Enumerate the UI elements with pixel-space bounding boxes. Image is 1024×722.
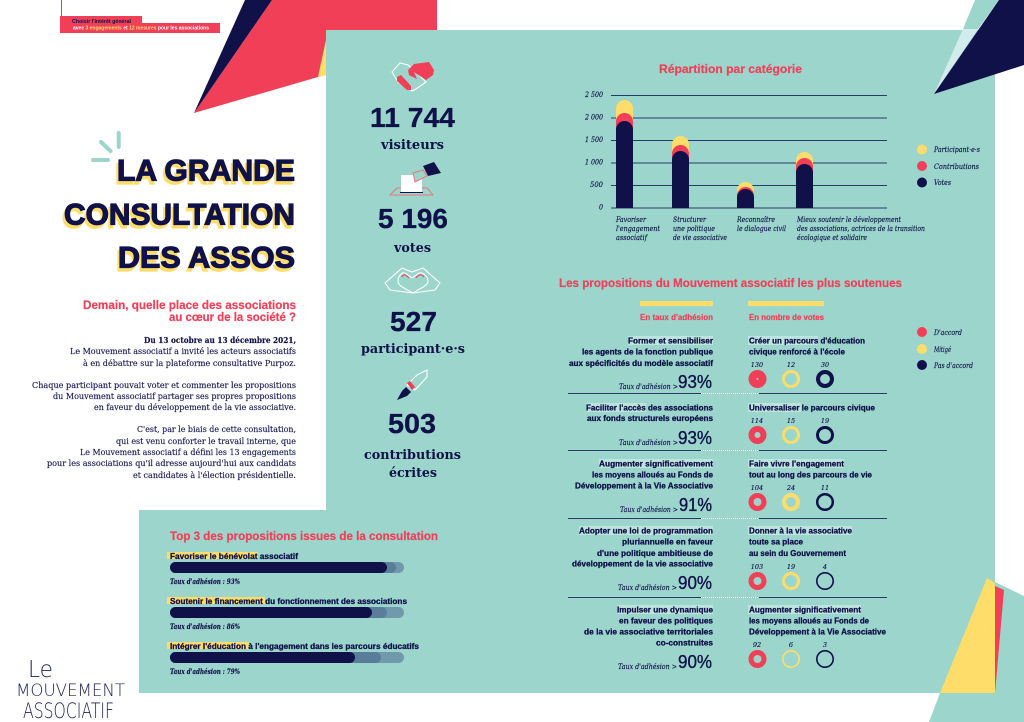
proposition row 1: 93% xyxy=(678,372,712,392)
subtitle xyxy=(83,300,296,324)
proposition row 1: les agents de la fonction publique xyxy=(582,346,713,356)
bar: soutenir le financement: Taux d'adhésion : 86% xyxy=(170,622,240,631)
proposition row 5: Impulser une dynamique xyxy=(617,604,713,614)
proposition row 3: Augmenter significativement xyxy=(599,458,713,468)
proposition row 5: en faveur des politiques xyxy=(619,616,713,626)
proposition row 5: Développement à la Vie Associative xyxy=(749,626,886,636)
category labels: l'engagement xyxy=(616,224,661,233)
panel: key figures xyxy=(361,62,465,481)
proposition row 5: 92 xyxy=(753,641,761,649)
proposition row 3 xyxy=(575,458,872,515)
proposition row 4: 4 xyxy=(822,563,827,571)
intro text: du Mouvement associatif partager ses propres propositions xyxy=(53,392,296,402)
document tag: avec 3 engagements et 12 mesures pour les associations xyxy=(73,26,209,32)
proposition row 2: 15 xyxy=(787,417,795,425)
bar: intégrer l'éducation: Taux d'adhésion : 79% xyxy=(170,667,240,676)
proposition row 3: les moyens alloués au Fonds de xyxy=(592,470,713,480)
proposition row 4: Donner à la vie associative xyxy=(749,526,852,536)
title: LA GRANDE xyxy=(117,154,295,188)
y axis labels: 1 000 xyxy=(585,158,603,166)
stat: contributions xyxy=(364,408,461,481)
document tag xyxy=(60,0,220,33)
proposition row 3: Taux d'adhésion > xyxy=(620,505,678,514)
stat: contributions: contributions xyxy=(364,448,461,463)
category labels: une politique xyxy=(673,224,715,233)
logo: Le Mouvement associatif: MOUVEMENT xyxy=(16,681,126,701)
y axis labels: 2 500 xyxy=(584,90,603,99)
legend: chart: Participant·e·s xyxy=(933,145,980,154)
category labels: de vie associative xyxy=(673,233,727,242)
proposition row 4: 19 xyxy=(787,563,795,571)
proposition row 4: Adopter une loi de programmation xyxy=(579,526,713,536)
category labels: écologique et solidaire xyxy=(797,233,867,242)
proposition row 2: Taux d'adhésion > xyxy=(619,438,678,447)
proposition row 4: d'une politique ambitieuse de xyxy=(597,548,713,558)
proposition row 4: 103 xyxy=(751,563,763,571)
intro text: pour les associations qu'il adresse aujourd'hui aux candidats xyxy=(47,459,296,469)
proposition row 3: 11 xyxy=(821,484,829,492)
proposition row 5: co-construites xyxy=(656,638,713,648)
bar: soutenir le financement xyxy=(167,596,407,631)
bar: favoriser l'engagement xyxy=(616,100,633,208)
title: LA GRANDE xyxy=(115,158,293,191)
proposition row 4: développement de la vie associative xyxy=(572,558,713,568)
proposition row 4: Taux d'adhésion > xyxy=(618,583,677,592)
proposition row 4: au sein du Gouvernement xyxy=(749,548,846,558)
proposition row 4: pluriannuelle en faveur xyxy=(622,536,714,546)
icon: pen xyxy=(397,370,427,400)
category labels: Structurer xyxy=(673,215,706,224)
panel: top 3 propositions xyxy=(167,529,438,676)
proposition row 3: tout au long des parcours de vie xyxy=(749,470,872,480)
y axis labels: 500 xyxy=(590,180,603,189)
heading: propositions: Les propositions du Mouvement associatif les plus soutenues xyxy=(559,276,902,290)
proposition row 1: 12 xyxy=(787,361,795,369)
category labels: Favoriser xyxy=(615,215,646,224)
intro text: Le Mouvement associatif a invité les acteurs associatifs xyxy=(70,346,296,357)
stat: votes: 5 196 xyxy=(378,203,448,234)
bar: favoriser le bénévolat xyxy=(167,551,404,586)
stat: visiteurs: visiteurs xyxy=(380,138,444,153)
proposition row 3: 104 xyxy=(751,484,763,492)
shape: bottom right triangles xyxy=(940,578,1004,693)
intro text: et candidates à l'élection présidentielle. xyxy=(133,470,296,481)
document tag: Choisir l'intérêt général xyxy=(72,19,132,25)
shape: top right triangles xyxy=(934,0,1024,94)
category labels: le dialogue civil xyxy=(737,224,786,233)
bar: structurer une politique xyxy=(672,136,689,208)
legend: votes xyxy=(917,327,973,370)
intro text: Chaque participant pouvait voter et commenter les propositions xyxy=(32,381,296,391)
legend: votes: Mitigé xyxy=(933,345,951,354)
heading: top 3: Top 3 des propositions issues de la consultation xyxy=(170,529,438,543)
stat: visiteurs: 11 744 xyxy=(370,102,455,133)
intro text: en faveur du développement de la vie associative. xyxy=(94,402,296,413)
shape: bottom right teal corner xyxy=(929,582,1024,722)
proposition row 5: Taux d'adhésion > xyxy=(618,662,677,671)
intro text: à en débattre sur la plateforme consultative Purpoz. xyxy=(83,358,296,369)
y axis labels: 1 500 xyxy=(585,135,603,144)
proposition row 3: Développement à la Vie Associative xyxy=(575,480,713,490)
proposition row 5: 6 xyxy=(789,641,793,649)
bar chart: répartition par catégorie xyxy=(584,62,925,242)
subtitle: au cœur de la société ? xyxy=(169,312,296,324)
proposition row 3: 91% xyxy=(679,495,712,515)
icon: handshake xyxy=(392,62,434,91)
legend: chart xyxy=(917,144,980,188)
legend: chart: Votes xyxy=(934,178,951,187)
column header: en taux d'adhésion xyxy=(640,301,713,322)
logo: Le Mouvement associatif: Le xyxy=(28,657,53,683)
proposition row 1 xyxy=(569,336,865,392)
shape: top centre triangles xyxy=(194,0,437,113)
icon: heart hands xyxy=(385,268,440,293)
proposition row 2 xyxy=(586,402,875,448)
stat: votes xyxy=(378,203,448,256)
bar: intégrer l'éducation xyxy=(167,641,419,676)
category labels: associatif xyxy=(616,233,648,242)
proposition row 1: aux spécificités du modèle associatif xyxy=(569,358,713,368)
proposition row 4 xyxy=(572,526,852,593)
category labels xyxy=(615,215,925,242)
intro text: Le Mouvement associatif a défini les 13 engagements xyxy=(80,447,296,458)
icon: ballot box xyxy=(390,162,441,195)
panel: main teal background xyxy=(139,30,995,693)
title: DES ASSOS xyxy=(116,245,293,278)
proposition row 3: Faire vivre l'engagement xyxy=(749,458,844,468)
proposition row 5: 3 xyxy=(823,641,827,649)
title: CONSULTATION xyxy=(62,202,293,235)
proposition row 1: Taux d'adhésion > xyxy=(619,382,678,391)
proposition row 2: 93% xyxy=(678,428,712,448)
bar: reconnaître le dialogue civil xyxy=(737,182,754,208)
row dividers xyxy=(568,394,887,598)
proposition row 1: 30 xyxy=(821,361,829,369)
proposition row 1: 130 xyxy=(751,361,763,369)
proposition row 2: 114 xyxy=(751,417,763,425)
proposition row 2: Universaliser le parcours civique xyxy=(749,402,875,412)
proposition row 5 xyxy=(584,604,886,672)
title: DES ASSOS xyxy=(118,242,295,274)
proposition row 1: Créer un parcours d'éducation xyxy=(749,336,865,346)
bar: favoriser le bénévolat: Taux d'adhésion : 93% xyxy=(170,577,240,586)
intro text xyxy=(32,335,296,481)
proposition row 2: Faciliter l'accès des associations xyxy=(586,402,713,412)
y axis labels: 0 xyxy=(599,202,603,212)
proposition row 4: 90% xyxy=(678,573,712,593)
title: CONSULTATION xyxy=(64,198,295,232)
bar: intégrer l'éducation: Intégrer l'éducation à l'engagement dans les parcours éducatifs xyxy=(170,641,419,651)
proposition row 5: Augmenter significativement xyxy=(749,604,861,614)
category labels: des associations, actrices de la transition xyxy=(797,224,925,233)
column header: en nombre de votes: En nombre de votes xyxy=(749,313,825,322)
stat: contributions: 503 xyxy=(388,408,436,439)
intro text: C'est, par le biais de cette consultation, xyxy=(137,425,296,435)
stat: visiteurs xyxy=(370,102,455,153)
proposition row 1: civique renforcé à l'école xyxy=(749,346,845,356)
proposition row 4: toute sa place xyxy=(749,536,803,546)
column header: en nombre de votes xyxy=(748,301,825,322)
logo: Le Mouvement associatif xyxy=(16,657,126,722)
legend: votes: D'accord xyxy=(933,328,962,337)
title xyxy=(62,154,295,278)
bar: favoriser le bénévolat: Favoriser le bénévolat associatif xyxy=(170,551,298,561)
bar: mieux soutenir xyxy=(796,152,813,208)
proposition row 1: Former et sensibiliser xyxy=(628,336,714,346)
stat: participants: participant·e·s xyxy=(361,342,465,357)
proposition row 3: 24 xyxy=(786,484,795,492)
stat: votes: votes xyxy=(393,241,431,256)
chart title: Répartition par catégorie xyxy=(659,62,802,76)
proposition row 5: 90% xyxy=(678,652,712,672)
category labels: Mieux soutenir le développement xyxy=(796,215,902,224)
category labels: Reconnaître xyxy=(736,215,775,224)
legend: votes: Pas d'accord xyxy=(933,361,973,370)
proposition row 2: 19 xyxy=(821,417,829,425)
y axis labels: 2 000 xyxy=(584,112,603,122)
stat: participants xyxy=(361,306,465,357)
proposition row 5: les moyens alloués au Fonds de xyxy=(749,616,869,626)
icon: title sparks xyxy=(93,133,119,160)
proposition row 5: de la vie associative territoriales xyxy=(584,626,713,636)
legend: chart: Contributions xyxy=(934,162,979,171)
stat: contributions: écrites xyxy=(389,466,437,481)
stat: participants: 527 xyxy=(390,306,437,337)
intro text: Du 13 octobre au 13 décembre 2021, xyxy=(144,335,296,346)
intro text: qui est venu conforter le travail interne, que xyxy=(116,437,296,447)
bar: soutenir le financement: Soutenir le financement du fonctionnement des associations xyxy=(170,596,407,606)
subtitle: Demain, quelle place des associations xyxy=(83,300,296,312)
proposition row 2: aux fonds structurels européens xyxy=(587,413,713,423)
column header: en taux d'adhésion: En taux d'adhésion xyxy=(640,313,713,322)
y axis labels xyxy=(584,90,603,212)
